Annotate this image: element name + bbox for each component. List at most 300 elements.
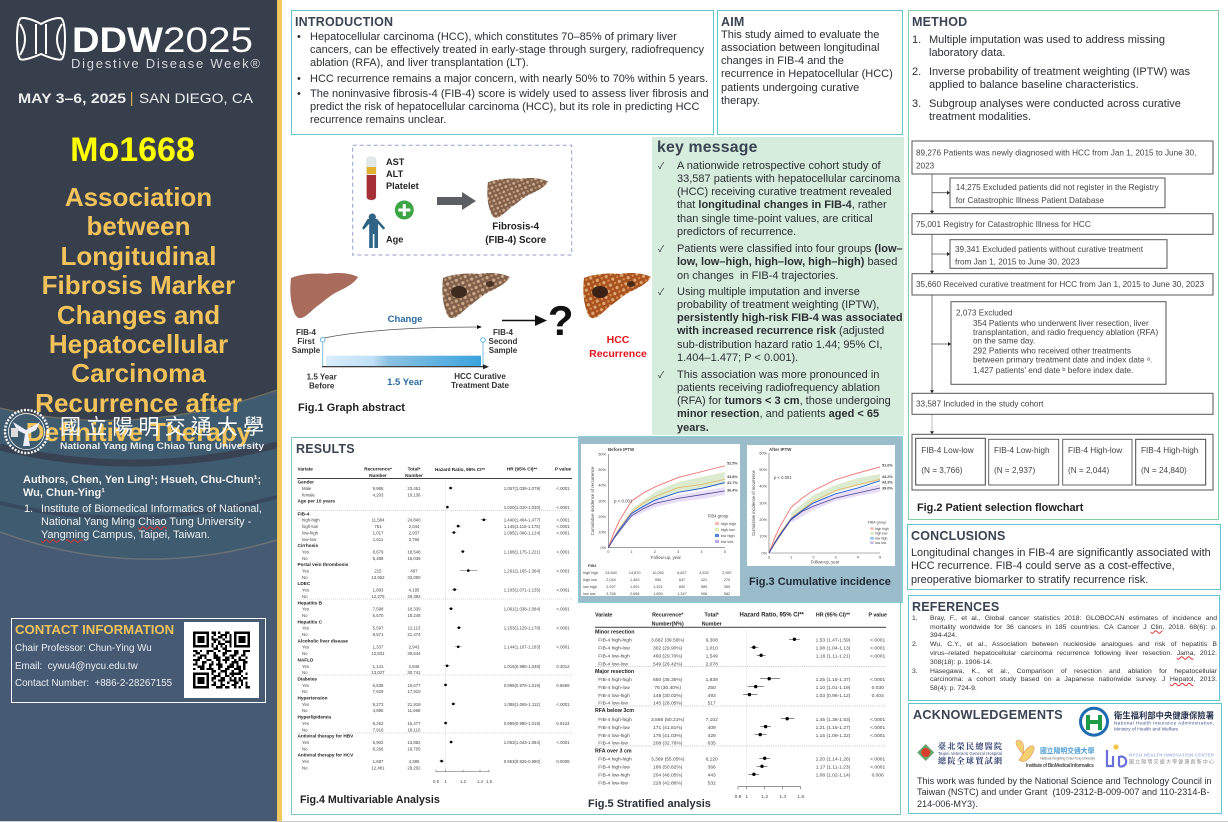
timeline of FIB-4 sampling: Change <box>388 314 422 325</box>
icon: healthy liver <box>290 273 358 318</box>
y axis ticks <box>759 452 768 556</box>
key message list: 1.404–1.477; P < 0.001). <box>677 352 798 364</box>
poster title: Recurrence after <box>35 388 242 418</box>
p values: <.0001 <box>556 550 570 554</box>
chart: after IPTW: 5 <box>879 556 881 560</box>
risk table: 589 <box>701 585 707 589</box>
recurrence counts <box>651 638 685 786</box>
DDW 2025 logo: DDW <box>72 21 163 60</box>
timeline labels: HCC Curative <box>454 372 506 381</box>
recurrence numbers: 5,597 <box>373 626 384 631</box>
FIB-4 formula dashed box: Platelet <box>386 181 419 191</box>
recurrence counts: 3,369 (55.05%) <box>651 756 685 762</box>
y axis ticks: 30% <box>759 501 768 505</box>
p values: 0.404 <box>872 693 884 699</box>
variable names: Yes <box>302 568 309 574</box>
p values: <.0001 <box>870 717 886 723</box>
p values: <.0001 <box>870 677 886 683</box>
caption: fig 2: Fig.2 Patient selection flowchart <box>917 502 1083 514</box>
confidence bands <box>791 474 880 520</box>
recurrence numbers: 12,481 <box>371 765 385 770</box>
p values: <.0001 <box>556 702 570 707</box>
curve end labels: 41.7% <box>727 481 738 485</box>
sidebar: Yangming Campus, Taipei, Taiwan. <box>41 528 210 540</box>
recurrence counts: 186 (50.82%) <box>653 764 683 770</box>
box: newly diagnosed <box>912 141 1213 174</box>
box: excluded not registered: for Catastrophic Illness Patient Database <box>956 196 1105 205</box>
key message list: sub-distribution hazard ratio 1.44; 95% CI, <box>677 338 882 350</box>
risk table: 10,062 <box>652 571 664 575</box>
reference list: 58(4): p. 724-9. <box>930 685 977 692</box>
logo: Institute of Biomedical Informatics: National YangMing Chiao Tung University <box>1040 756 1095 760</box>
hazard ratio values: 1.15 (1.09-1.22) <box>816 733 851 739</box>
poster number: Mo1668 <box>70 131 195 169</box>
total counts: 517 <box>708 701 716 707</box>
total numbers: 10,136 <box>407 492 421 497</box>
variable names: Yes <box>302 550 309 554</box>
forest axis: 1.6 <box>797 794 804 800</box>
recurrence counts: 302 (29.90%) <box>653 646 683 652</box>
conference date and location: MAY 3–6, 2025 <box>18 90 126 106</box>
variable names: Yes <box>302 626 309 631</box>
risk table: 2,987 <box>722 571 732 575</box>
icon: fibrotic liver <box>487 178 548 218</box>
p values: <.0001 <box>870 638 886 644</box>
forest markers <box>743 638 800 776</box>
total counts: 409 <box>708 725 716 731</box>
aim text: association between longitudinal <box>721 42 879 54</box>
column headers: Variate <box>298 466 313 472</box>
chart: before IPTW: 2 <box>654 550 656 554</box>
legend: low high <box>875 537 888 541</box>
arrow: change curve <box>324 327 478 338</box>
forest axis: 1.5 <box>486 779 493 784</box>
p values: <.0001 <box>556 626 570 631</box>
box: 2,073 excluded: 1,427 patients' end date ᵇ before index date. <box>973 366 1133 375</box>
forest markers <box>439 487 487 762</box>
timeline of FIB-4 sampling: HCC <box>607 334 630 346</box>
FIB-4 formula dashed box: Age <box>386 234 403 244</box>
recurrence counts: 176 (41.03%) <box>653 733 683 739</box>
poster title: Carcinoma <box>71 358 206 388</box>
panel: key message <box>652 137 904 435</box>
hazard ratio values: 1.440(1.404-1.477) <box>504 518 541 523</box>
column headers: Number <box>405 473 423 478</box>
key message list: Patients were classified into four groups (low– <box>677 243 903 255</box>
recurrence numbers: 8,679 <box>373 550 384 554</box>
subgroup labels: FIB-4 high-low <box>598 764 630 770</box>
forest axis: 1.4 <box>477 779 484 784</box>
timeline labels: Sample <box>292 346 321 355</box>
recurrence counts: 3,682 (39.56%) <box>651 638 685 644</box>
introduction bullets: • <box>297 73 301 85</box>
total numbers: 11,668 <box>408 708 421 713</box>
y axis ticks: 0% <box>600 546 607 550</box>
recurrence counts: 171 (41.81%) <box>653 725 683 731</box>
variable names: Yes <box>302 683 309 688</box>
variable names: NAFLD <box>298 657 314 662</box>
chart: before IPTW <box>581 444 740 596</box>
forest axis: 1.2 <box>761 794 768 800</box>
variable names: Male <box>302 486 312 491</box>
hazard ratio values: 1.45 (1.38-1.53) <box>816 717 851 723</box>
hazard ratio values: 1.061(1.038-1.084) <box>504 607 541 612</box>
p values: <.0001 <box>870 646 886 652</box>
total counts: 443 <box>708 772 716 778</box>
total counts: 532 <box>708 780 716 786</box>
recurrence numbers: 7,916 <box>373 727 384 732</box>
timeline of FIB-4 sampling: ? <box>548 297 574 344</box>
chart: before IPTW: 0 <box>607 550 609 554</box>
total numbers: 33,090 <box>407 575 421 580</box>
recurrence numbers: 8,571 <box>373 632 384 637</box>
total numbers: 15,248 <box>407 613 421 618</box>
variable names <box>298 480 354 770</box>
reference list: virus–related hepatocellular carcinoma recurrence following liver resection. Jama, 2012. <box>930 650 1217 657</box>
curve end labels: 44.2% <box>882 475 893 479</box>
icon: recurrence liver <box>583 273 651 318</box>
variable names: Gender <box>298 480 314 485</box>
key message list: ✓ <box>658 244 664 254</box>
column headers: Total* <box>705 612 720 618</box>
risk table: 2,656 <box>630 592 639 596</box>
group: high-high: (N = 24,840) <box>1141 466 1187 475</box>
p values: <.0001 <box>870 654 886 660</box>
poster title: Fibrosis Marker <box>42 270 235 300</box>
poster title: between <box>86 211 191 241</box>
risk table: high low <box>583 578 597 582</box>
key message list: that longitudinal changes in FIB-4, rather <box>677 199 887 211</box>
method steps: Multiple imputation was used to address missing <box>929 34 1165 46</box>
poster title: Changes and <box>57 300 220 330</box>
logo: Institute of Biomedical Informatics: Institute of BioMedical Informatics <box>1026 763 1094 769</box>
hazard ratio values <box>816 638 851 778</box>
variable names: No <box>302 765 308 770</box>
conference date and location <box>18 90 254 106</box>
aim text: changes in FIB-4 and the <box>721 55 844 67</box>
curve end labels: 52.5% <box>727 461 738 465</box>
column headers: HR (95% CI)** <box>816 612 851 618</box>
key message list: (RFA) for tumors < 3 cm, those undergoing <box>677 395 891 407</box>
p values: <.0001 <box>870 764 886 770</box>
recurrence numbers: 12,831 <box>371 651 385 656</box>
timeline labels: 1.5 Year <box>307 372 337 382</box>
variable names: No <box>302 689 308 694</box>
y axis ticks <box>598 452 607 550</box>
y axis ticks: 20% <box>598 515 607 519</box>
sidebar background and waves <box>0 0 282 821</box>
p values: 0.006 <box>872 772 884 778</box>
group: low-high: (N = 2,937) <box>994 466 1035 475</box>
total counts: 493 <box>708 693 716 699</box>
p values <box>870 638 886 778</box>
recurrence numbers: 1,611 <box>373 537 384 542</box>
key message list: 33,587 patients with hepatocellular carcinoma <box>677 173 900 185</box>
reference list: mortality worldwide for 36 cancers in 185 countries. CA Cancer J Clin, 2018. 68(6): p. <box>930 624 1217 631</box>
method steps: laboratory data. <box>929 47 1005 59</box>
forest axis: 1.4 <box>779 794 786 800</box>
contact details: Email: cywu4@nycu.edu.tw <box>15 661 138 672</box>
risk table: low high <box>583 585 597 589</box>
variable names: Yes <box>302 588 309 593</box>
introduction bullets: Hepatocellular carcinoma (HCC), which constitutes 70–85% of primary liver <box>310 31 677 43</box>
total numbers: 2,943 <box>409 645 420 650</box>
timeline labels: Second <box>489 337 518 346</box>
hazard ratio values: 1.144(1.107-1.183) <box>504 645 541 650</box>
method steps: 2. <box>912 66 921 78</box>
recurrence numbers: 13,952 <box>371 575 385 580</box>
caption: fig 4: Fig.4 Multivariable Analysis <box>300 794 440 806</box>
hazard ratio values: 1.095(1.066-1.124) <box>504 530 541 535</box>
box: excluded not registered: 14,275 Excluded patients did not register in the Registry <box>956 183 1160 192</box>
legend <box>708 514 736 544</box>
risk table: 421 <box>701 578 707 582</box>
funding statement: 214-006-MY3). <box>917 799 978 809</box>
p values: <.0001 <box>556 518 570 523</box>
hazard ratio values: 1.08 (1.04-1.13) <box>816 646 851 652</box>
p values: <.0001 <box>556 505 570 510</box>
total counts: 250 <box>708 685 716 691</box>
recurrence numbers: 4,203 <box>373 492 384 497</box>
box: included cohort: 33,587 Included in the study cohort <box>916 400 1044 408</box>
recurrence counts: 549 (26.42%) <box>653 661 683 667</box>
subgroup labels: FIB-4 low-low <box>598 661 628 667</box>
heading: key message: key message <box>657 139 758 156</box>
logo: Taipei Veterans General Hospital: Taipei Veterans General Hospital <box>938 751 1002 756</box>
subgroup labels: RFA over 3 cm <box>595 749 632 755</box>
chart: before IPTW: p < 0.001 <box>614 498 633 504</box>
variable names: No <box>302 708 308 713</box>
key message list: Using multiple imputation and inverse <box>677 286 860 298</box>
forest axis <box>735 787 804 800</box>
risk table: 1,363 <box>630 578 639 582</box>
total counts: 7,102 <box>706 717 718 723</box>
FIB-4 formula dashed box: Fibrosis-4 <box>492 222 540 232</box>
subgroup labels: FIB-4 low-low <box>598 741 628 747</box>
lab inputs: AST <box>386 157 405 167</box>
conclusions text: Longitudinal changes in FIB-4 are significantly associated with <box>911 547 1211 559</box>
legend: low high <box>721 534 735 538</box>
heading: results: RESULTS <box>296 442 355 456</box>
reference list: 1. <box>912 615 918 622</box>
y axis ticks: 60% <box>598 452 607 456</box>
total numbers: 21,919 <box>407 702 421 707</box>
aim text: This study aimed to evaluate the <box>721 28 879 40</box>
total numbers: 15,677 <box>407 683 421 688</box>
y axis ticks: 40% <box>759 485 768 489</box>
poster title: Definitive Therapy <box>26 417 251 447</box>
total counts: 9,308 <box>706 638 718 644</box>
panel: cumulative incidence <box>578 436 903 603</box>
chart: patient selection flowchart <box>912 140 1214 490</box>
group: low-low: FIB-4 Low-low <box>921 446 974 455</box>
key message list: minor resection, and patients aged < 65 <box>677 408 879 420</box>
hazard ratio values: 0.998(0.978-1.019) <box>504 683 541 688</box>
subgroup labels: FIB-4 high-low <box>598 685 630 691</box>
column headers: Number <box>369 473 387 478</box>
recurrence numbers: 215 <box>374 568 382 574</box>
column headers: P value <box>868 612 887 618</box>
column headers: Variate <box>595 612 612 618</box>
poster title: Association <box>65 182 212 212</box>
DDW 2025 logo: 2025 <box>163 21 253 60</box>
y axis ticks: 30% <box>598 499 607 503</box>
panel: graph abstract <box>290 144 651 414</box>
subgroup labels: FIB-4 high-high <box>598 717 632 723</box>
curve end labels: 36.4% <box>727 488 738 492</box>
p values: 0.3012 <box>556 664 570 669</box>
risk table: 270 <box>724 578 730 582</box>
subgroup labels: FIB-4 low-low <box>598 701 628 707</box>
logo: NHI <box>1079 707 1214 737</box>
total numbers: 4,385 <box>409 759 420 764</box>
total numbers: 30,741 <box>407 670 421 675</box>
chart: after IPTW: 3 <box>835 556 837 560</box>
hazard ratio values: 1.261(1.165-1.364) <box>504 568 541 574</box>
risk table: 582 <box>724 592 730 596</box>
y axis ticks: 20% <box>759 518 768 522</box>
contact heading: CONTACT INFORMATION <box>15 622 174 637</box>
column headers <box>595 612 887 628</box>
legend: high high <box>875 527 889 531</box>
risk table: 908 <box>701 592 707 596</box>
poster title <box>26 182 251 447</box>
y axis ticks: 10% <box>759 535 768 539</box>
key message list: ✓ <box>658 370 664 380</box>
hazard ratio values: 1.17 (1.11-1.23) <box>816 764 851 770</box>
y axis ticks: 60% <box>759 452 768 456</box>
affiliation <box>24 502 262 543</box>
subgroup labels: FIB-4 high-low <box>598 646 630 652</box>
chart: after IPTW: p < 0.001 <box>774 475 792 480</box>
logo: NHI: National Health Insurance Administration, <box>1114 720 1214 726</box>
box: received curative treatment: 35,660 Received curative treatment for HCC from Jan 1, 2015 to June 30, 2023 <box>916 280 1205 289</box>
variable names: high-low <box>302 524 319 529</box>
box: excluded not registered <box>950 178 1165 208</box>
total numbers: 15,477 <box>407 721 421 726</box>
hazard ratio values: 0.953(0.926-0.980) <box>504 759 541 764</box>
total counts: 635 <box>708 741 716 747</box>
risk table: 14,870 <box>629 571 641 575</box>
recurrence numbers: 7,629 <box>373 689 384 694</box>
group: high-low: (N = 2,044) <box>1068 466 1109 475</box>
forest axis: 0.9 <box>735 794 742 800</box>
subgroup labels: RFA below 3cm <box>595 708 634 714</box>
box: received curative treatment <box>912 274 1213 295</box>
caption: fig 1: Fig.1 Graph abstract <box>298 402 405 414</box>
heading: references: REFERENCES <box>912 600 999 614</box>
logo: NYCU Health Innovation Center: 國立陽明交通大學健康創新中心 <box>1129 758 1214 766</box>
key message list: low, low–high, high–low, high–high) based <box>677 256 897 268</box>
key message list: This association was more pronounced in <box>677 368 879 380</box>
timeline labels: Before <box>309 382 335 390</box>
sidebar: Institute of Biomedical Informatics of National, <box>41 502 262 514</box>
recurrence numbers: 5,902 <box>373 740 384 745</box>
key message list: predictors of recurrence. <box>677 226 796 238</box>
total numbers: 2,846 <box>409 664 420 669</box>
reference list <box>912 615 1217 692</box>
variable names: No <box>302 594 308 599</box>
risk table: high high <box>583 571 598 575</box>
chart: stratified forest plot <box>595 612 887 800</box>
variable names: Alcoholic liver disease <box>298 638 348 643</box>
timeline labels: First <box>297 337 315 346</box>
timeline of FIB-4 sampling: 1.5 Year <box>387 377 423 388</box>
hazard ratio values: 1.088(1.065-1.112) <box>504 702 541 707</box>
recurrence counts: 148 (30.02%) <box>653 693 683 699</box>
risk table: 1,321 <box>653 585 663 589</box>
risk table: low low <box>583 592 596 596</box>
risk table: 647 <box>679 578 685 582</box>
method steps: applied to balance baseline characteristics. <box>929 79 1139 91</box>
hazard ratio values: 1.063(1.043-1.084) <box>504 740 541 745</box>
introduction bullets <box>297 31 709 126</box>
total numbers: 13,882 <box>407 740 421 745</box>
contact information box <box>11 618 266 703</box>
variable names: Yes <box>302 759 309 764</box>
panel: acknowledgements <box>908 703 1222 814</box>
hazard ratio values: 1.08 (1.02-1.14) <box>816 772 851 778</box>
legend: high low <box>875 532 888 536</box>
authors <box>23 474 261 498</box>
variable names: Hepatitis C <box>298 619 323 624</box>
chart: before IPTW: 1 <box>631 550 633 554</box>
recurrence numbers: 13,027 <box>371 670 385 675</box>
group: low-high: FIB-4 Low-high <box>994 446 1050 455</box>
logo: NHI: Ministry of Health and Welfare <box>1114 726 1178 732</box>
chart: before IPTW: Cumulative incidence of recurrence <box>590 466 595 535</box>
variable names: Yes <box>302 645 309 650</box>
risk table: 1,901 <box>630 585 639 589</box>
total numbers: 18,548 <box>407 550 421 554</box>
conclusions text: HCC recurrence. FIB-4 could serve as a cost-effective, <box>911 560 1175 572</box>
chart: multivariable forest plot <box>297 466 572 784</box>
variable names: No <box>302 613 308 618</box>
risk table: 359 <box>724 585 730 589</box>
forest axis: 1.2 <box>460 779 467 784</box>
chart: after IPTW: Cumulative incidence of recurrence <box>751 470 756 536</box>
panel: introduction <box>291 10 714 135</box>
flow arrows <box>930 174 951 434</box>
chart: before IPTW: Before IPTW <box>608 447 635 452</box>
hazard ratio values <box>504 486 541 764</box>
recurrence numbers: 6,570 <box>373 613 384 618</box>
column headers: Hazard Ratio, 95% CI** <box>740 612 805 618</box>
total counts: 1,549 <box>706 654 718 660</box>
funding statement: This work was funded by the National Science and Technology Council in <box>917 776 1212 786</box>
legend: FIB4 group <box>868 520 886 524</box>
recurrence numbers: 1,017 <box>373 530 384 535</box>
legend: high low <box>721 528 735 532</box>
aim text: recurrence in Hepatocellular (HCC) <box>721 68 893 80</box>
box: 2,073 excluded <box>951 302 1166 384</box>
total numbers: 21,474 <box>407 632 421 637</box>
DDW 2025 logo <box>16 17 260 71</box>
hazard ratio values: 1.21 (1.15-1.27) <box>816 725 851 731</box>
panel: aim <box>717 10 903 135</box>
group: high-high: FIB-4 High-high <box>1141 446 1199 455</box>
logo: Institute of Biomedical Informatics: 國立陽明交通大學 <box>1040 745 1095 755</box>
logo: Institute of Biomedical Informatics <box>1016 740 1095 769</box>
reference list: Wu, C.Y., et al., Association between nucleoside analogues and risk of hepatitis B <box>930 641 1217 648</box>
risk table: 2,937 <box>606 585 616 589</box>
timeline labels: Sample <box>489 346 518 355</box>
subgroup labels: FIB-4 high-high <box>598 756 632 762</box>
y axis ticks: 40% <box>598 484 607 488</box>
subgroup labels: FIB-4 low-high <box>598 654 630 660</box>
total numbers: 19,705 <box>407 746 421 751</box>
recurrence numbers: 6,539 <box>373 683 384 688</box>
